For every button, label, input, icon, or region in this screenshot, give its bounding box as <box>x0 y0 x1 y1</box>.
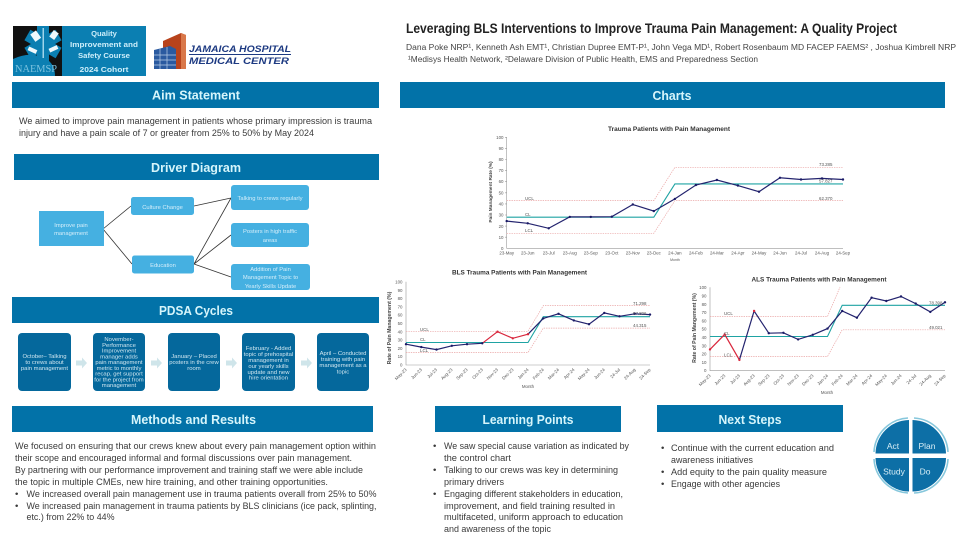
chart: trauma patients with pain management: 80 <box>499 157 504 162</box>
PDSA step: October: October– Talking <box>22 354 67 360</box>
learning points text: the control chart <box>444 453 511 464</box>
chart: trauma patients with pain management: Trauma Patients with Pain Management <box>608 126 731 133</box>
chart: ALS trauma patients with pain management: 50 <box>702 326 707 332</box>
chart: BLS trauma patients with pain management: Nov-23 <box>486 367 500 381</box>
chart: ALS trauma patients with pain management: Mar-24 <box>845 373 859 387</box>
logo: NAEMSP quality course: NAEMSP <box>15 64 57 75</box>
icon: plan do study act cycle: Plan <box>918 441 936 451</box>
chart: ALS trauma patients with pain management: 24-Sep <box>933 373 947 387</box>
methods text: • <box>15 489 18 500</box>
heading: next steps <box>657 405 843 432</box>
chart: BLS trauma patients with pain management: May-24 <box>577 367 591 381</box>
PDSA step: November: management <box>102 383 137 389</box>
driver: addition of topic: Addition of Pain <box>250 267 291 273</box>
logo: NAEMSP quality course: Improvement and <box>70 40 138 49</box>
chart: ALS trauma patients with pain management: Jul-23 <box>729 373 741 385</box>
learning points text: improvement, and field training resulted in <box>444 501 615 512</box>
chart: ALS trauma patients with pain management: 0 <box>704 368 707 373</box>
learning points text: Engaging different stakeholders in education, <box>444 489 623 500</box>
chart: ALS trauma patients with pain management: ALS Trauma Patients with Pain Management <box>752 276 887 284</box>
chart: trauma patients with pain management: 24-Jul <box>795 250 807 256</box>
methods text: By partnering with our performance improvement and training staff we were able include <box>15 465 363 476</box>
aim text: injury and have a pain scale of 7 or greater from 25% to 50% by May 2024 <box>19 128 315 139</box>
chart: ALS trauma patients with pain management: 24-Aug <box>918 373 932 387</box>
PDSA step: April: training with pain <box>321 357 365 363</box>
chart: BLS trauma patients with pain management: LCL <box>420 348 429 353</box>
driver: improve pain management <box>39 211 104 246</box>
chart: BLS trauma patients with pain management: Oct-23 <box>471 367 484 380</box>
heading: driver diagram: Driver Diagram <box>151 160 241 175</box>
chart: ALS trauma patients with pain management: Sep-23 <box>757 373 771 387</box>
heading: PDSA cycles: PDSA Cycles <box>159 303 233 318</box>
chart: ALS trauma patients with pain management: May-24 <box>874 373 888 387</box>
heading: methods and results <box>12 406 373 432</box>
PDSA step: February: topic of prehospital <box>244 352 293 358</box>
logo: NAEMSP quality course: Quality <box>91 29 118 38</box>
logo: NAEMSP quality course <box>13 26 146 76</box>
driver: culture change: Culture Change <box>142 205 183 211</box>
learning points text: multifaceted, uniform approach to education <box>444 512 623 523</box>
PDSA step: November: metric to monthly <box>97 366 141 372</box>
PDSA arrows <box>76 358 312 368</box>
driver: posters <box>231 223 309 247</box>
chart: BLS trauma patients with pain management: 71.298 <box>633 301 647 306</box>
chart: BLS trauma patients with pain management: Dec-23 <box>501 367 515 381</box>
chart: BLS trauma patients with pain management: 100 <box>395 280 403 284</box>
chart: trauma patients with pain management: 0 <box>501 246 504 251</box>
driver connectors <box>103 198 231 277</box>
learning points text: • <box>433 489 436 500</box>
PDSA step: October: pain management <box>21 366 68 372</box>
methods text <box>15 441 377 523</box>
heading: next steps: Next Steps <box>718 412 782 427</box>
PDSA step: April: management as a <box>319 363 367 369</box>
chart: trauma patients with pain management: 23-Aug <box>563 250 577 256</box>
PDSA step: April: April – Conducted <box>320 351 366 357</box>
chart: BLS trauma patients with pain management: UCL <box>420 327 429 332</box>
chart: BLS trauma patients with pain management: 60 <box>398 312 403 318</box>
next steps text: Continue with the current education and <box>671 443 834 454</box>
aim text: We aimed to improve pain management in patients whose primary impression is trauma <box>19 116 373 127</box>
chart: trauma patients with pain management: UCL <box>525 196 534 201</box>
icon: plan do study act cycle <box>874 418 948 493</box>
chart: BLS trauma patients with pain management: Jul-23 <box>426 367 439 379</box>
chart: ALS trauma patients with pain management: 30 <box>702 344 707 348</box>
logo: NAEMSP quality course: Safety Course <box>78 51 130 60</box>
driver: education: Education <box>150 263 176 269</box>
methods text: their scope and encouraged informal and formal discussions over pain management. <box>15 453 352 464</box>
chart: trauma patients with pain management: 23-Jul <box>543 250 555 256</box>
chart: trauma patients with pain management: 23-Oct <box>605 250 619 256</box>
chart: ALS trauma patients with pain management: LCL <box>724 352 733 358</box>
chart: trauma patients with pain management: 24-Jan <box>668 250 682 256</box>
PDSA step: October <box>18 333 71 391</box>
PDSA step: February: February - Added <box>246 346 291 352</box>
chart: BLS trauma patients with pain management: Aug-23 <box>440 367 454 381</box>
chart: BLS trauma patients with pain management: 90 <box>398 288 403 293</box>
driver: improve pain management: management <box>54 231 88 237</box>
chart: trauma patients with pain management: 23-Sep <box>584 250 598 256</box>
chart: BLS trauma patients with pain management: May-23 <box>394 367 408 381</box>
chart: ALS trauma patients with pain management: 24-Jul <box>905 373 917 385</box>
chart: ALS trauma patients with pain management: Jan-24 <box>816 373 830 386</box>
chart: trauma patients with pain management: 73.285 <box>819 162 833 167</box>
next steps text: • <box>661 443 664 454</box>
chart: ALS trauma patients with pain management: 10 <box>702 360 707 365</box>
panel: driver diagram <box>14 154 379 290</box>
chart: trauma patients with pain management: 24-Sep <box>836 250 851 256</box>
panel: charts: Charts <box>652 88 692 103</box>
chart: ALS trauma patients with pain management: Nov-23 <box>786 373 800 387</box>
chart: trauma patients with pain management: CL <box>525 212 531 217</box>
chart: trauma patients with pain management: 23-Jun <box>521 250 535 256</box>
PDSA step: November: pain management <box>95 360 143 366</box>
driver: talking to crews <box>231 185 309 210</box>
chart: BLS trauma patients with pain management: CL <box>420 337 426 342</box>
chart: trauma patients with pain management: 40 <box>499 202 504 206</box>
chart: trauma patients with pain management: 23-May <box>499 250 515 256</box>
chart: BLS trauma patients with pain management: 0 <box>400 362 403 368</box>
driver: improve pain management: Improve pain <box>54 223 88 229</box>
learning points text: primary drivers <box>444 477 504 488</box>
chart: BLS trauma patients with pain management: Jun-23 <box>410 367 423 380</box>
chart: BLS trauma patients with pain management: 40 <box>398 330 403 334</box>
logo: NAEMSP quality course: 2024 Cohort <box>80 65 129 74</box>
authors: Dana Poke NRP¹, Kenneth Ash EMT¹, Christian Dupree EMT-P¹, John Vega MD¹, Robert Rosenbaum MD FACEP FAEMS² , Joshua Kimbrell NRP <box>406 42 956 52</box>
chart: BLS trauma patients with pain management: 80 <box>398 296 403 301</box>
methods text: We increased pain management in trauma patients by BLS clinicians (ice pack, splinting, <box>26 501 376 512</box>
chart: trauma patients with pain management: 100 <box>496 135 504 140</box>
chart: ALS trauma patients with pain management: Oct-23 <box>772 373 785 386</box>
chart: BLS trauma patients with pain management: 10 <box>398 354 403 359</box>
PDSA step: April: topic <box>337 370 349 376</box>
icon: plan do study act cycle: Study <box>883 466 906 476</box>
next steps text: Engage with other agencies <box>671 479 780 490</box>
chart: ALS trauma patients with pain management: Jun-23 <box>713 373 727 386</box>
chart: trauma patients with pain management: 24-May <box>752 250 767 256</box>
chart: ALS trauma patients with pain management: Jun-24 <box>890 373 903 386</box>
chart: trauma patients with pain management: 57.827 <box>819 178 833 184</box>
icon: plan do study act cycle: Act <box>887 441 900 451</box>
chart: BLS trauma patients with pain management: 50 <box>398 321 403 326</box>
chart: trauma patients with pain management: 24-Jun <box>773 250 787 256</box>
chart: ALS trauma patients with pain management <box>692 276 947 395</box>
learning points text: We saw special cause variation as indicated by <box>444 441 629 452</box>
driver: addition of topic <box>231 264 310 290</box>
aim text <box>19 116 373 139</box>
logo: Jamaica Hospital Medical Center: MEDICAL CENTER <box>189 55 289 66</box>
heading: aim statement: Aim Statement <box>152 88 241 102</box>
chart: trauma patients with pain management: 23-Nov <box>626 250 641 256</box>
PDSA step: November <box>93 333 145 391</box>
chart: trauma patients with pain management: 30 <box>499 212 504 218</box>
panel: methods and results <box>12 406 377 523</box>
chart: BLS trauma patients with pain management: Apr-24 <box>563 367 576 380</box>
next steps text <box>661 443 834 490</box>
PDSA step: November: for the project from <box>94 377 144 383</box>
affiliations: ¹Medisys Health Network, ²Delaware Division of Public Health, EMS and Preparedness Section <box>408 54 758 64</box>
next steps text: Add equity to the pain quality measure <box>671 467 827 478</box>
learning points text <box>433 441 629 535</box>
chart: ALS trauma patients with pain management: May-23 <box>698 373 712 387</box>
PDSA step: January: room <box>187 366 201 372</box>
chart: trauma patients with pain management: Month <box>670 258 680 262</box>
chart: trauma patients with pain management: 60 <box>499 179 504 184</box>
chart: ALS trauma patients with pain management: UCL <box>724 311 733 316</box>
PDSA step: February <box>242 333 295 391</box>
PDSA step: April <box>317 333 369 391</box>
driver: addition of topic: Yearly Skills Update <box>245 284 296 290</box>
next steps text: awareness initiatives <box>671 455 753 466</box>
panel: PDSA cycles <box>12 297 379 391</box>
heading: learning points <box>435 406 621 432</box>
methods text: the topic in multiple CMEs, new hire training, and other training opportunities. <box>15 477 328 488</box>
chart: trauma patients with pain management: 62.370 <box>819 196 833 201</box>
heading: charts <box>400 82 945 108</box>
panel: charts <box>400 82 945 108</box>
chart: ALS trauma patients with pain management: CL <box>724 331 730 336</box>
chart: trauma patients with pain management: 10 <box>499 235 504 240</box>
chart: trauma patients with pain management: 70 <box>499 168 504 173</box>
chart: trauma patients with pain management: 24-Feb <box>689 250 703 256</box>
chart: BLS trauma patients with pain management: 30 <box>398 338 403 342</box>
driver: addition of topic: Management Topic to <box>243 275 298 281</box>
chart: trauma patients with pain management: 20 <box>499 224 504 229</box>
driver: posters: areas <box>263 238 277 244</box>
methods text: etc.) from 22% to 44% <box>26 512 115 523</box>
PDSA step: November: Performance <box>102 343 137 349</box>
chart: ALS trauma patients with pain management: Month <box>821 390 834 395</box>
icon: plan do study act cycle: Do <box>920 466 931 476</box>
chart: trauma patients with pain management: 24-Apr <box>731 250 745 256</box>
chart: ALS trauma patients with pain management: 20 <box>702 352 707 356</box>
chart: BLS trauma patients with pain management: 24-Sep <box>638 367 652 381</box>
chart: ALS trauma patients with pain management: 80 <box>702 302 707 307</box>
driver: education <box>132 256 194 274</box>
chart: trauma patients with pain management <box>488 126 851 262</box>
methods text: • <box>15 501 18 512</box>
chart: BLS trauma patients with pain management: Jan-24 <box>517 367 530 380</box>
chart: BLS trauma patients with pain management: Feb-24 <box>532 367 545 381</box>
learning points text: and awareness of the topic <box>444 524 551 535</box>
chart: trauma patients with pain management: 50 <box>499 190 504 196</box>
panel: learning points <box>433 406 629 535</box>
panel: next steps <box>657 405 843 490</box>
chart: ALS trauma patients with pain management: 100 <box>699 285 707 290</box>
learning points text: Talking to our crews was key in determining <box>444 465 618 476</box>
PDSA step: November: Improvement <box>102 348 137 354</box>
chart: ALS trauma patients with pain management: 78.398 <box>929 300 943 306</box>
chart: ALS trauma patients with pain management: 70 <box>702 310 707 315</box>
heading: aim statement <box>12 82 379 108</box>
chart: BLS trauma patients with pain management <box>387 270 652 389</box>
next steps text: • <box>661 467 664 478</box>
heading: PDSA cycles <box>12 297 379 323</box>
methods text: We increased overall pain management use in trauma patients overall from 25% to 50% <box>26 489 377 500</box>
chart: BLS trauma patients with pain management: 20 <box>398 346 403 351</box>
chart: BLS trauma patients with pain management: 44.315 <box>633 323 647 328</box>
chart: ALS trauma patients with pain management: Apr-24 <box>860 373 874 386</box>
chart: BLS trauma patients with pain management: Jun-24 <box>593 367 606 380</box>
chart: BLS trauma patients with pain management: Month <box>522 384 535 389</box>
PDSA step: November: manager adds <box>100 354 138 360</box>
driver: culture change <box>131 197 194 215</box>
chart: trauma patients with pain management: Pain Management Rate (%) <box>488 161 494 223</box>
chart: ALS trauma patients with pain management: 60 <box>702 318 707 324</box>
PDSA step: November: recap, get support <box>95 372 143 378</box>
PDSA step: February: management in <box>248 358 289 364</box>
heading: driver diagram <box>14 154 379 180</box>
learning points text: • <box>433 441 436 452</box>
chart: trauma patients with pain management: 90 <box>499 146 504 151</box>
chart: BLS trauma patients with pain management: Sep-23 <box>455 367 469 381</box>
chart: ALS trauma patients with pain management: Feb-24 <box>831 373 844 387</box>
chart: ALS trauma patients with pain management: 40 <box>702 335 707 340</box>
heading: learning points: Learning Points <box>482 412 574 427</box>
PDSA step: February: hire orientation <box>249 376 288 382</box>
PDSA step: February: our yearly skills <box>248 364 289 370</box>
chart: trauma patients with pain management: 23-Dec <box>647 250 662 256</box>
chart: BLS trauma patients with pain management: 24-Jul <box>609 367 621 379</box>
chart: trauma patients with pain management: 24-Aug <box>815 250 830 256</box>
PDSA step: January <box>168 333 220 391</box>
chart: ALS trauma patients with pain management: Dec-23 <box>801 373 815 387</box>
logo: Jamaica Hospital Medical Center <box>154 33 291 69</box>
PDSA step: January: posters in the crew <box>169 360 219 366</box>
PDSA step: November: November- <box>104 337 134 343</box>
methods text: We focused on ensuring that our crews knew about every pain management option within <box>15 441 376 452</box>
chart: ALS trauma patients with pain management: 90 <box>702 294 707 298</box>
chart: BLS trauma patients with pain management: 70 <box>398 304 403 310</box>
next steps text: • <box>661 479 664 490</box>
driver: talking to crews: Talking to crews regularly <box>237 196 303 202</box>
chart: trauma patients with pain management: 24-Mar <box>710 250 724 256</box>
panel: aim statement <box>12 82 379 139</box>
chart: ALS trauma patients with pain management: Aug-23 <box>742 373 756 387</box>
chart: BLS trauma patients with pain management: Mar-24 <box>547 367 561 381</box>
chart: trauma patients with pain management: LCL <box>525 228 534 233</box>
PDSA step: January: January – Placed <box>171 354 217 360</box>
learning points text: • <box>433 465 436 476</box>
PDSA step: October: to crews about <box>25 360 64 366</box>
chart: ALS trauma patients with pain management: 49.021 <box>929 325 943 330</box>
chart: BLS trauma patients with pain management: Rate of Pain Management (%) <box>387 291 393 364</box>
logo: Jamaica Hospital Medical Center: JAMAICA HOSPITAL <box>189 43 291 54</box>
chart: BLS trauma patients with pain management: 24-Aug <box>623 367 637 381</box>
chart: ALS trauma patients with pain management: Rate of Pain Mangement (%) <box>692 293 698 363</box>
heading: methods and results: Methods and Results <box>131 412 256 427</box>
chart: BLS trauma patients with pain management: BLS Trauma Patients with Pain Management <box>452 270 588 276</box>
PDSA step: February: update and new <box>248 370 290 376</box>
driver: posters: Posters in high traffic <box>243 229 297 235</box>
chart: BLS trauma patients with pain management: 57.806 <box>633 311 647 316</box>
